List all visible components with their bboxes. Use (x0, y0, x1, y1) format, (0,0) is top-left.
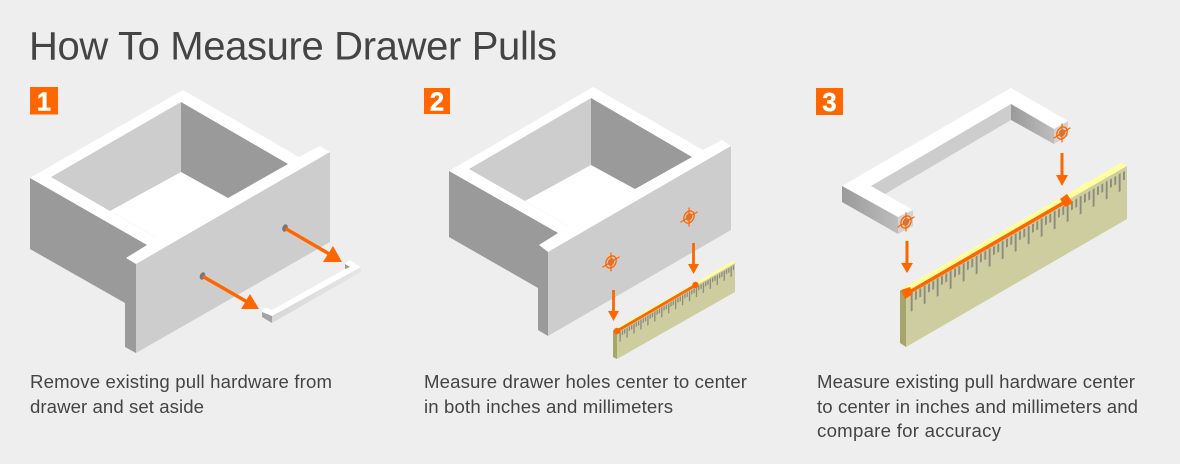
step 1 caption: Remove existing pull hardware from (30, 371, 332, 392)
step 1 badge (30, 87, 58, 116)
panel: step 1 remove pull (30, 87, 361, 417)
pull hardware, step 3 (842, 88, 1068, 234)
title: How To Measure Drawer Pulls (29, 24, 557, 68)
icon: target on left end (898, 212, 914, 232)
ruler, step 3 (900, 163, 1127, 347)
arrow: upper hole to pull (281, 224, 342, 262)
icon: target on upper hole (680, 208, 698, 226)
step 3 badge: 3 (822, 89, 837, 117)
step 2 badge: 2 (430, 88, 444, 116)
step 3 caption: to center in inches and millimeters and (817, 396, 1138, 417)
step 1 caption (30, 371, 332, 417)
drawer illustration, step 2 (449, 87, 731, 336)
step 3 caption (817, 371, 1138, 441)
arrow: left end to ruler (901, 241, 913, 273)
step 2 caption: in both inches and millimeters (424, 396, 673, 417)
arrow: lower hole to ruler (608, 290, 619, 321)
arrow: lower hole to pull (199, 272, 259, 309)
step 3 badge (816, 88, 843, 117)
step 2 caption: Measure drawer holes center to center (424, 371, 747, 392)
arrow: right end to ruler (1056, 153, 1068, 186)
step 2 caption (424, 371, 747, 417)
step 3 caption: compare for accuracy (817, 420, 1002, 441)
ruler, step 2 (613, 261, 735, 359)
icon: target on right end (1054, 124, 1070, 142)
panel: step 2 measure holes (424, 87, 747, 417)
arrow: upper hole to ruler (688, 243, 699, 274)
measuring line with end points (901, 194, 1073, 299)
step 1 badge: 1 (37, 88, 51, 116)
step 3 caption: Measure existing pull hardware center (817, 371, 1135, 392)
icon: target on lower hole (602, 252, 620, 272)
step 1 caption: drawer and set aside (30, 396, 204, 417)
drawer illustration, step 1 (30, 90, 330, 353)
panel: step 3 measure pull (816, 88, 1138, 441)
step 2 badge (424, 88, 450, 116)
measuring line with end points (614, 282, 699, 334)
pull hardware set aside (262, 260, 361, 323)
